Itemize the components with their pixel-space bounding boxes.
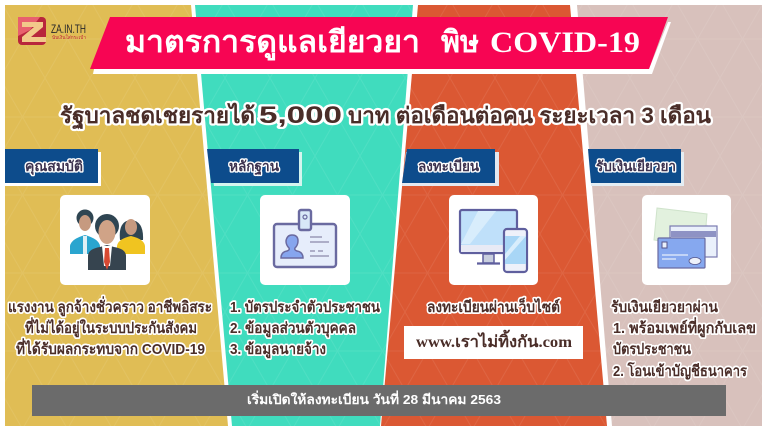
bottom bar [32,385,726,416]
text: evidence: 2. ข้อมูลส่วนตัวบุคคล [230,320,356,338]
title banner: พิษ [441,26,479,59]
url box: www.เราไม่ทิ้งกัน.com [416,329,573,351]
icon: id card [260,195,350,285]
tab: qualifications: คุณสมบัติ [25,158,83,175]
panel: orange background [381,5,607,426]
text: register: ลงทะเบียนผ่านเว็บไซต์ [427,297,560,316]
text: receive aid: บัตรประชาชน [613,341,692,358]
tab: qualifications [5,149,101,186]
text: receive aid: 1. พร้อมเพย์ที่ผูกกับเลข [613,317,756,338]
icon: people [60,195,150,285]
panel: rose background [577,5,762,426]
url box [404,326,583,359]
panel: receive aid [588,149,756,380]
panel: evidence [207,149,381,359]
subtitle: รัฐบาลชดเชยรายได้ [60,102,255,130]
text: evidence: 1. บัตรประจำตัวประชาชน [230,299,381,316]
tab: receive aid [588,149,684,186]
text: receive aid: 2. โอนเข้าบัญชีธนาคาร [613,361,748,380]
text: evidence [230,299,381,359]
subtitle [60,102,711,130]
bottom bar: เริ่มเปิดให้ลงทะเบียน วันที่ 28 มีนาคม 2563 [247,390,501,407]
tab: register [402,149,499,186]
tab: evidence [207,149,302,186]
title banner: COVID-19 [490,26,640,59]
logo: นับเงินใส่กระเป๋า [52,34,86,41]
icon: monitor and phone [449,195,538,285]
text: qualifications: แรงงาน ลูกจ้างชั่วคราว อาชีพอิสระ [8,296,212,317]
panel: yellow background [5,5,228,426]
text: receive aid: รับเงินเยียวยาผ่าน [611,298,719,316]
subtitle: บาท ต่อเดือนต่อคน ระยะเวลา 3 เดือน [348,103,711,128]
icon: cards and cash [642,195,731,285]
panel: qualifications [5,149,212,358]
panel: register [402,149,583,359]
subtitle: 5,000 [259,102,342,129]
text: evidence: 3. ข้อมูลนายจ้าง [230,341,326,359]
title banner: มาตรการดูแลเยียวยา [125,26,420,61]
panel: teal background [195,5,413,426]
logo: ZA.IN.TH [51,22,86,36]
tab: register: ลงทะเบียน [418,158,479,174]
title banner [90,17,671,74]
tab: receive aid: รับเงินเยียวยา [596,158,676,174]
text: qualifications: ที่ได้รับผลกระทบจาก COVID-19 [16,338,205,358]
logo [18,17,86,45]
text: qualifications: ที่ไม่ได้อยู่ในระบบประกันสังคม [25,317,197,338]
text: qualifications [8,296,212,358]
text: receive aid [611,298,756,380]
tab: evidence: หลักฐาน [229,158,279,176]
